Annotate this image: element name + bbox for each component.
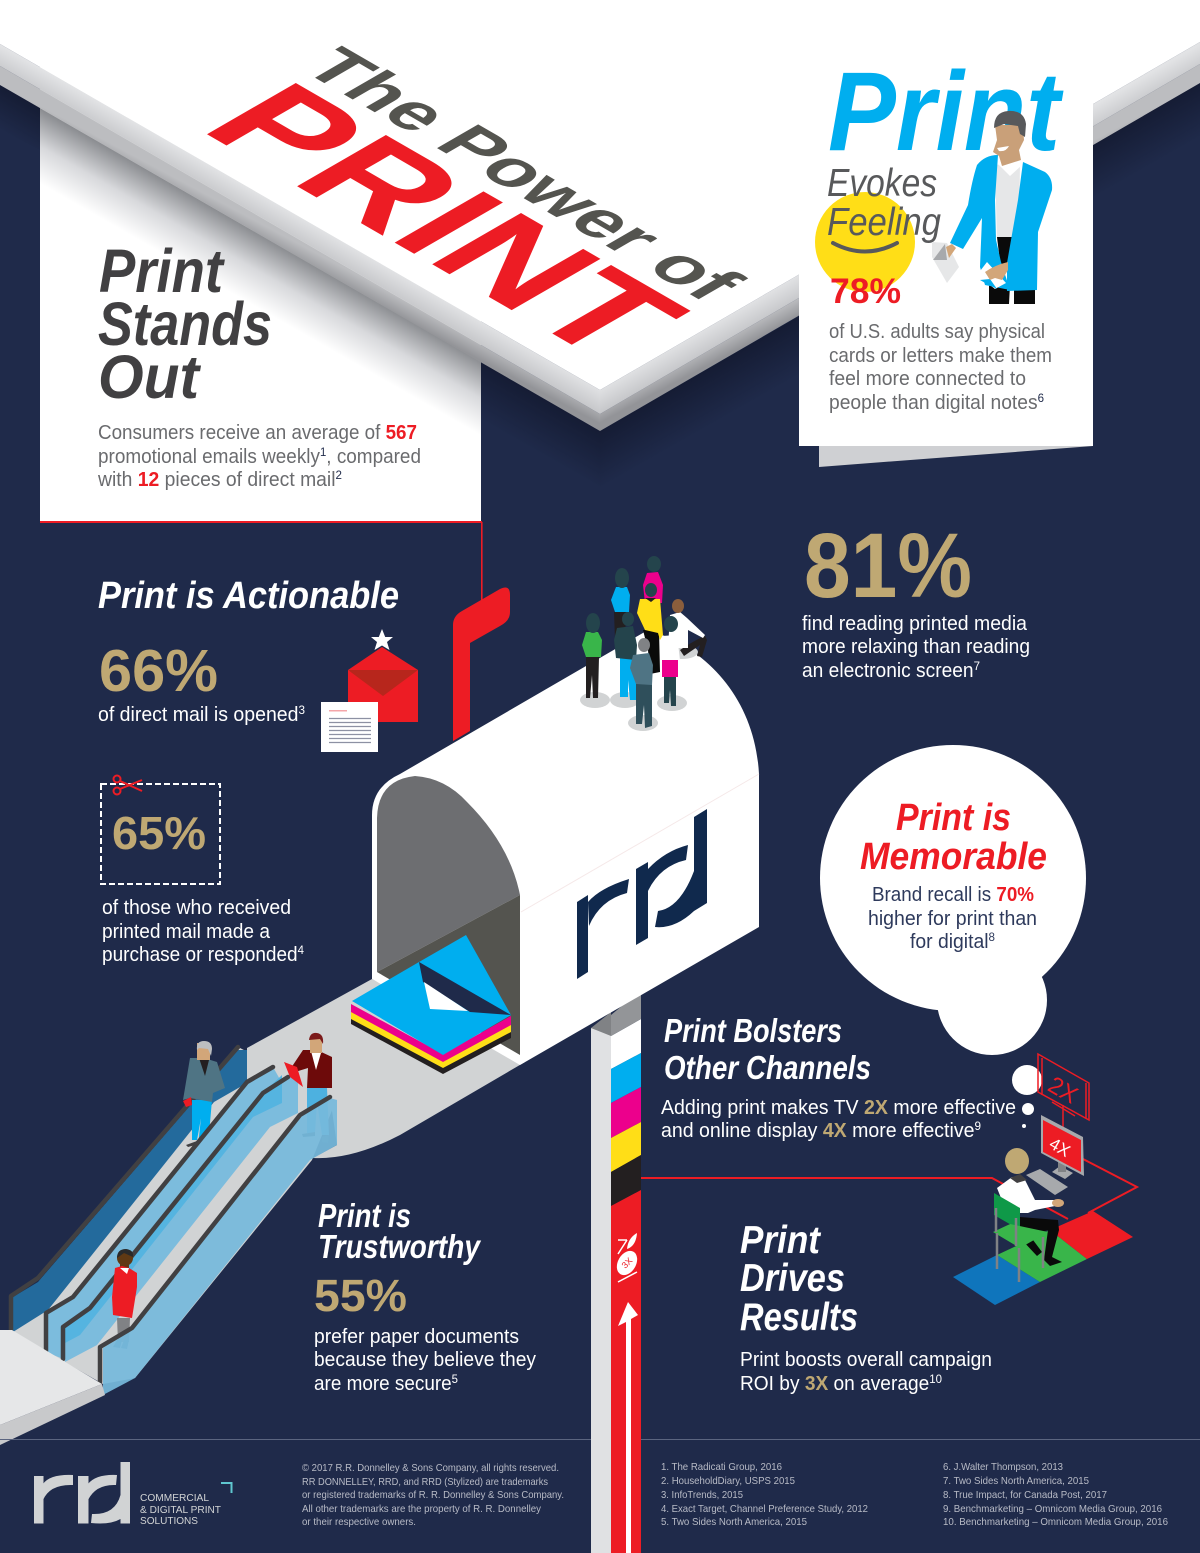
footer references column 1: 2. HouseholdDiary, USPS 2015	[661, 1475, 795, 1487]
illustration: man with card	[932, 111, 1052, 304]
heading: print is memorable: Print is	[896, 797, 1011, 839]
text: 78% detail: of U.S. adults say physical	[829, 321, 1045, 343]
icon: 3x ROI	[613, 1233, 641, 1282]
text: 81% detail	[802, 613, 1030, 682]
figure: man with red folder	[284, 1033, 332, 1143]
footer copyright: or their respective owners.	[302, 1516, 416, 1528]
heading: print stands out	[98, 237, 272, 411]
text: ROI: Print boosts overall campaign	[740, 1349, 992, 1371]
text: ROI: ROI by 3X on average	[740, 1373, 934, 1395]
heading: print drives results: Results	[740, 1296, 858, 1339]
arrow up	[618, 1302, 638, 1553]
keyboard	[1026, 1169, 1068, 1195]
bottom landing	[0, 1330, 105, 1445]
heading: print drives results	[740, 1219, 858, 1339]
footer references column 1	[661, 1461, 868, 1528]
figure: man in grey-blue	[628, 638, 658, 731]
floor tiles	[953, 1211, 1133, 1305]
footer copyright: All other trademarks are the property of R. R. Donnelley	[302, 1503, 542, 1515]
escalator steps	[12, 1048, 337, 1384]
text: email vs direct mail	[97, 422, 421, 491]
heading: print is trustworthy: Print is	[318, 1197, 411, 1234]
chair	[993, 1193, 1048, 1282]
text: TV and display	[661, 1097, 1016, 1142]
logo tagline: SOLUTIONS	[140, 1515, 198, 1527]
text: email vs direct mail: , compared	[326, 446, 421, 468]
figure: woman in blue	[611, 568, 630, 640]
logo tagline	[140, 1492, 222, 1527]
connector line from card to flag	[481, 522, 483, 600]
footer references column 2: 8. True Impact, for Canada Post, 2017	[943, 1489, 1107, 1501]
text: direct mail opened: 3	[298, 703, 305, 717]
footer logo	[34, 1462, 232, 1527]
icon: smiley circle	[815, 192, 915, 292]
text: brand recall: higher for print than	[868, 908, 1037, 930]
text: TV and display: and online display 4X more effective	[661, 1120, 978, 1142]
top folded sheet	[0, 0, 1200, 431]
heading: print stands out: Out	[98, 343, 202, 411]
escalator middle panels	[46, 1067, 298, 1362]
tv outline with 2x: 2X	[1043, 1071, 1082, 1109]
icon: scissors	[114, 776, 142, 794]
footer copyright: RR DONNELLEY, RRD, and RRD (Stylized) are trademarks	[302, 1476, 548, 1488]
text: email vs direct mail: 2	[336, 468, 342, 482]
seated worker	[997, 1148, 1064, 1266]
text: purchase response: 4	[298, 943, 304, 957]
footer references column 2	[943, 1461, 1168, 1528]
escalator middle handrails	[46, 1067, 288, 1359]
figure: man in teal	[610, 612, 640, 708]
heading: print is trustworthy: Trustworthy	[318, 1228, 481, 1265]
text: brand recall: 8	[989, 930, 995, 944]
icon: red envelope and letter	[321, 629, 418, 752]
stat block: 81%	[802, 515, 1030, 682]
text: paper documents: because they believe they	[314, 1349, 536, 1371]
logo bracket	[221, 1483, 232, 1493]
text: email vs direct mail: 1	[320, 445, 327, 459]
footer copyright: or registered trademarks of R. R. Donnelley & Sons Company.	[302, 1489, 564, 1501]
stat: 55%: 55%	[314, 1270, 407, 1321]
escalator back handrail	[11, 1047, 238, 1331]
text: 78% detail	[829, 321, 1052, 414]
title line: print: PRINT	[170, 61, 720, 379]
text: purchase response: purchase or responded	[102, 944, 308, 966]
text: direct mail opened: of direct mail is opened	[98, 704, 304, 726]
heading: print: Print	[828, 49, 1064, 174]
text: brand recall	[868, 884, 1037, 953]
fold shadow on background	[0, 83, 1200, 490]
text: paper documents: prefer paper documents	[314, 1326, 519, 1348]
mail stack	[351, 935, 511, 1074]
floor ramp	[247, 979, 525, 1158]
group of people on mailbox	[580, 556, 707, 731]
footer copyright	[302, 1462, 564, 1528]
logo tagline: COMMERCIAL	[140, 1492, 209, 1504]
computer monitor	[1041, 1115, 1084, 1179]
logo: rrd	[34, 1462, 130, 1524]
escalators	[0, 1033, 337, 1445]
heading: print drives results: Print	[740, 1219, 822, 1262]
text: paper documents: 5	[452, 1372, 458, 1386]
text: purchase response: of those who received	[102, 897, 291, 919]
red connector line	[641, 1159, 1137, 1219]
text: paper documents: are more secure	[314, 1373, 460, 1395]
text: brand recall: Brand recall is 70%	[872, 884, 1034, 906]
text: 78% detail: 6	[1038, 391, 1044, 405]
panel: print evokes feeling	[799, 40, 1093, 467]
section: print is trustworthy	[314, 1197, 536, 1395]
figure: woman with skirt	[657, 616, 687, 711]
text: purchase response: printed mail made a	[102, 921, 271, 943]
mailbox opening	[377, 776, 520, 1055]
tv outline with 2x	[1038, 1054, 1089, 1127]
text: email vs direct mail: with 12 pieces of direct mail	[98, 469, 342, 491]
speech bubble: print is memorable	[820, 745, 1086, 1055]
footer references column 2: 9. Benchmarketing – Omnicom Media Group, 2016	[943, 1503, 1162, 1515]
heading: print bolsters: Other Channels	[664, 1049, 871, 1086]
figure: seated man	[666, 599, 707, 659]
text: 81% detail: find reading printed media	[802, 613, 1028, 635]
figure: woman in red	[112, 1249, 137, 1349]
text: email vs direct mail: promotional emails weekly	[98, 446, 333, 468]
computer monitor: 4X	[1046, 1134, 1074, 1161]
escalator front handrail	[100, 1097, 330, 1382]
text: 81% detail: more relaxing than reading	[802, 636, 1030, 658]
footer copyright: © 2017 R.R. Donnelley & Sons Company, all rights reserved.	[302, 1462, 559, 1474]
text: brand recall: for digital	[910, 931, 991, 953]
text: purchase response	[102, 897, 304, 966]
footer references column 1: 3. InfoTrends, 2015	[661, 1489, 743, 1501]
escalator front panel	[103, 1098, 337, 1395]
stat block: 81%: 81%	[804, 515, 972, 617]
escalator back panel	[13, 1050, 247, 1332]
mailbox	[351, 630, 759, 1074]
text: TV and display: 9	[974, 1119, 981, 1133]
logo: rrd on mailbox	[577, 809, 707, 979]
icon: 3x ROI: 3X	[620, 1256, 634, 1270]
section: print bolsters other channels	[661, 1012, 1016, 1142]
heading: print bolsters	[664, 1012, 871, 1086]
figure: grey haired man	[183, 1041, 225, 1153]
mailbox body	[372, 630, 759, 1065]
heading: evokes feeling: Evokes	[827, 162, 937, 205]
panel: print stands out	[40, 60, 482, 523]
text: 78% detail: feel more connected to	[829, 368, 1026, 390]
heading: print stands out: Stands	[98, 290, 272, 358]
footer references column 2: 10. Benchmarketing – Omnicom Media Group, 2016	[943, 1516, 1168, 1528]
title line: the power of: The Power of	[287, 38, 760, 311]
heading: print bolsters: Print Bolsters	[664, 1012, 842, 1049]
text: 81% detail: an electronic screen	[802, 660, 981, 682]
footer references column 2: 6. J.Walter Thompson, 2013	[943, 1461, 1063, 1473]
footer references column 2: 7. Two Sides North America, 2015	[943, 1475, 1089, 1487]
mailbox flag	[453, 587, 510, 741]
heading: print is trustworthy	[318, 1197, 481, 1265]
heading: print drives results: Drives	[740, 1257, 845, 1300]
stat: 65%: 65%	[112, 807, 206, 859]
logo tagline: & DIGITAL PRINT	[140, 1504, 222, 1516]
coupon: 65%	[101, 776, 220, 884]
post with colour bars	[591, 990, 641, 1553]
title	[170, 38, 760, 379]
illustration: worker at desk	[953, 1054, 1133, 1305]
heading: print stands out: Print	[99, 237, 225, 305]
heading: print is actionable: Print is Actionable	[98, 575, 399, 617]
footer references column 1: 5. Two Sides North America, 2015	[661, 1516, 807, 1528]
heading: evokes feeling: Feeling	[827, 201, 941, 244]
text: 78% detail: people than digital notes	[829, 392, 1046, 414]
figure: woman in magenta	[643, 556, 663, 603]
footer references column 1: 1. The Radicati Group, 2016	[661, 1461, 782, 1473]
figure: man in yellow	[637, 583, 663, 674]
text: ROI	[740, 1349, 992, 1395]
heading: print is memorable	[860, 797, 1047, 878]
stat: 66%: 66%	[99, 638, 218, 704]
thought bubbles	[1012, 1065, 1042, 1128]
footer divider	[0, 1438, 1200, 1440]
heading: print is memorable: Memorable	[860, 836, 1047, 878]
section: print is actionable	[98, 575, 418, 966]
section: print drives results	[740, 1219, 992, 1395]
text: email vs direct mail: Consumers receive an average of 567	[98, 422, 417, 444]
footer references column 1: 4. Exact Target, Channel Preference Study, 2012	[661, 1503, 868, 1515]
text: TV and display: Adding print makes TV 2X more effective	[661, 1097, 1016, 1119]
figure: woman in green	[580, 613, 610, 708]
stat: 78%: 78%	[830, 272, 901, 311]
text: ROI: 10	[929, 1372, 942, 1386]
text: 81% detail: 7	[974, 659, 980, 673]
text: paper documents	[314, 1326, 536, 1395]
text: 78% detail: cards or letters make them	[829, 345, 1052, 367]
heading: evokes feeling	[827, 162, 941, 244]
